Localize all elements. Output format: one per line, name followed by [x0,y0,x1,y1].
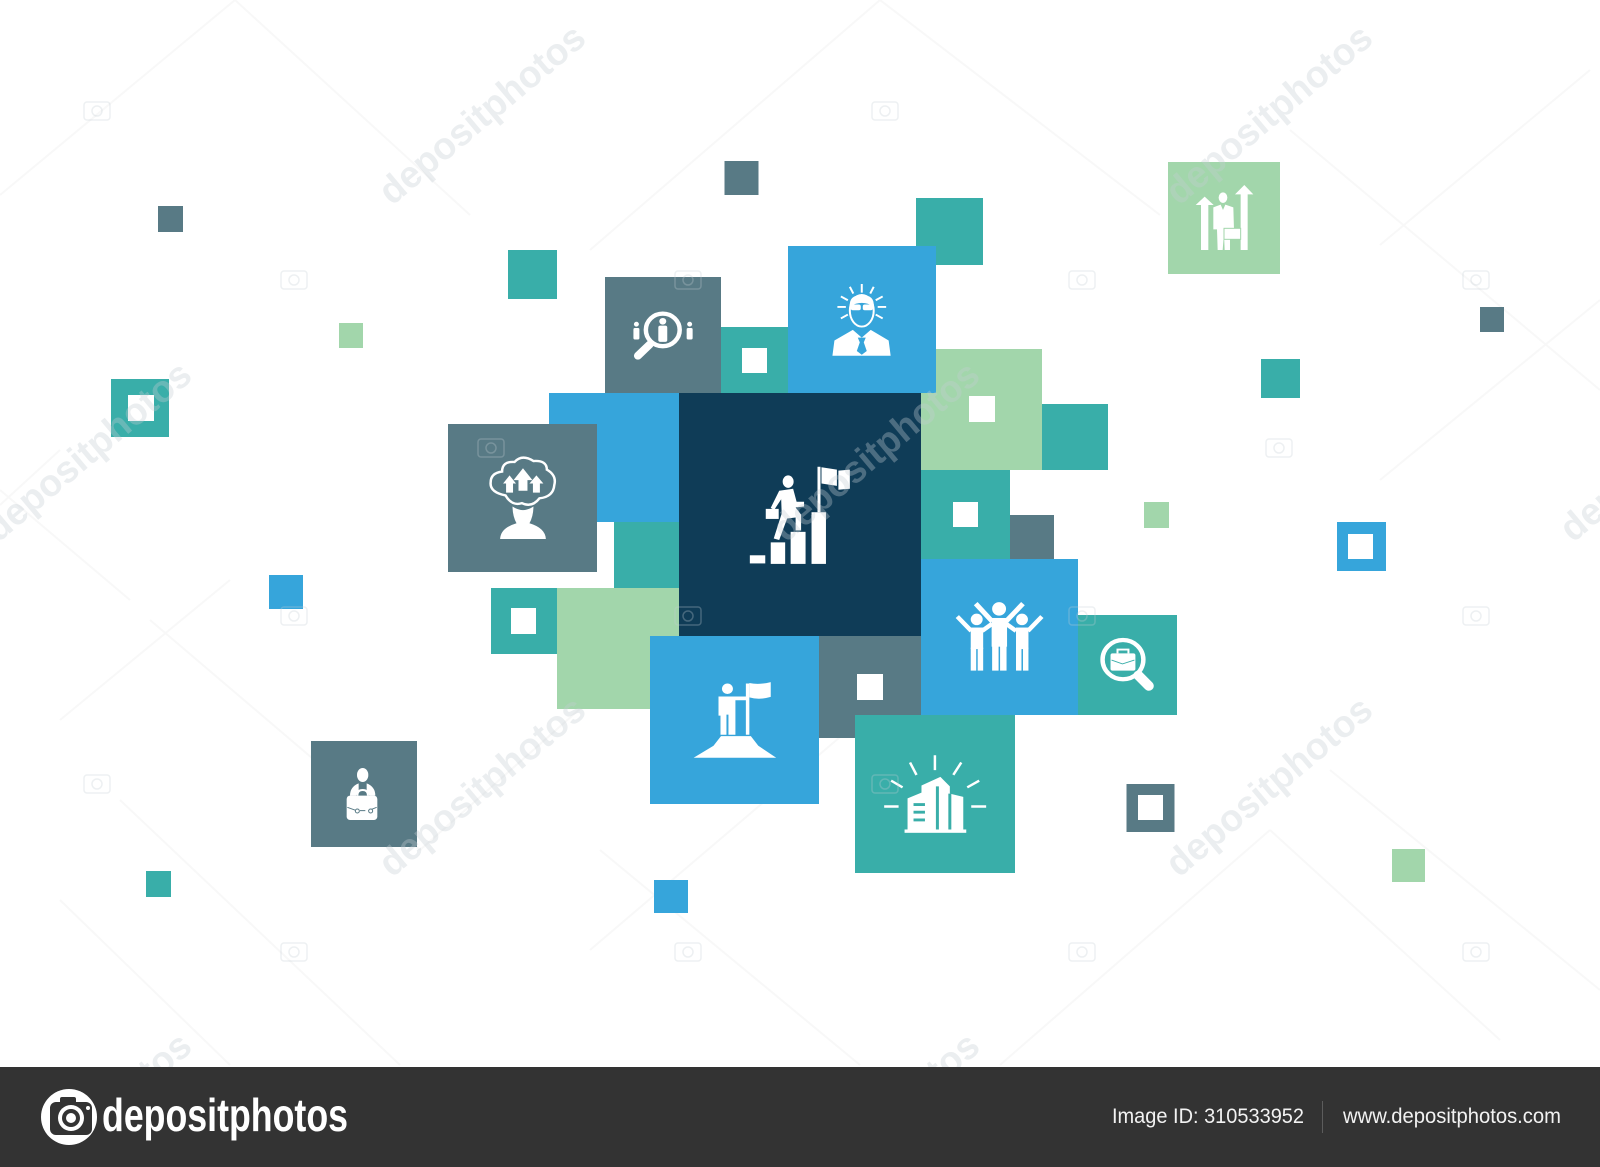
panel: central goal block [679,393,921,636]
icon: man with sunglasses and rays [832,284,891,356]
icon: magnifier over briefcase [1103,640,1149,686]
footer bar [0,1067,1600,1167]
panel: career arrows, top right [1168,162,1280,274]
panel: green block upper right of centre [921,349,1042,470]
panel: reaching the summit [650,636,819,804]
panel: slate block right [1010,515,1054,559]
icon: businessman climbing bars to flag [750,467,850,564]
panel: slate block with white centre, below centre [819,636,921,738]
scattered square: slate with white centre, lower right [1126,784,1174,832]
watermark: stock photo text and camera marks: depositphotos [1158,16,1381,213]
scattered square: teal upper left of cluster [508,250,557,299]
scattered square: blue bottom [654,880,688,913]
panel: visionary leader [788,246,936,393]
icon: man with flag on mountain [694,682,776,758]
panel: blue block left of centre [549,393,679,522]
panel: green block lower left [557,588,679,709]
scattered square: slate top left [158,206,183,232]
scattered square: slate top centre [724,161,758,195]
logo: camera in white circle [41,1089,97,1145]
panel: company building [855,715,1015,873]
icon: glowing office building [884,755,986,833]
website address: www.depositphotos.com [1342,1105,1561,1128]
scattered square: teal behind top panel [916,198,983,265]
icon: three people with raised arms [957,602,1042,671]
panel: people search [605,277,721,393]
panel: growth thinking [448,424,597,572]
scattered square: blue left [269,575,303,609]
icon: magnifier over person [633,314,693,356]
scattered square: blue with white centre, right [1337,522,1386,571]
watermark: stock photo text and camera marks: depositphotos [1158,688,1381,885]
scattered square: green lower right [1392,849,1425,882]
scattered square: teal right [1261,359,1300,398]
scattered square: slate far right [1480,307,1504,332]
scattered square: teal lower left [146,871,171,897]
panel: teal block left of centre [614,522,679,588]
icon: person holding briefcase [347,768,377,820]
panel: teal block right [1042,404,1108,470]
image id: Image ID: 310533952 [1112,1105,1304,1128]
panel: teal block with white centre, right [921,470,1010,559]
watermark: stock photo text and camera marks: depositphotos [371,688,594,885]
scattered square: green right of cluster [1144,502,1169,528]
scattered square: green left [339,323,363,348]
scattered square: teal with white centre, left [111,379,169,437]
logo wordmark: depositphotos [102,1089,348,1141]
panel: team celebration [921,559,1078,715]
panel: job search [1078,615,1177,715]
icon: head with cloud and arrows [491,458,555,539]
icon: person between rising arrows [1196,185,1253,250]
watermark: stock photo text and camera marks: depositphotos [765,353,988,550]
panel: teal block with white centre, top [721,327,788,393]
panel: person with briefcase, lower left [311,741,417,847]
watermark: stock photo text and camera marks: depositphotos [371,16,594,213]
panel: teal block with white centre, lower left [491,588,557,654]
